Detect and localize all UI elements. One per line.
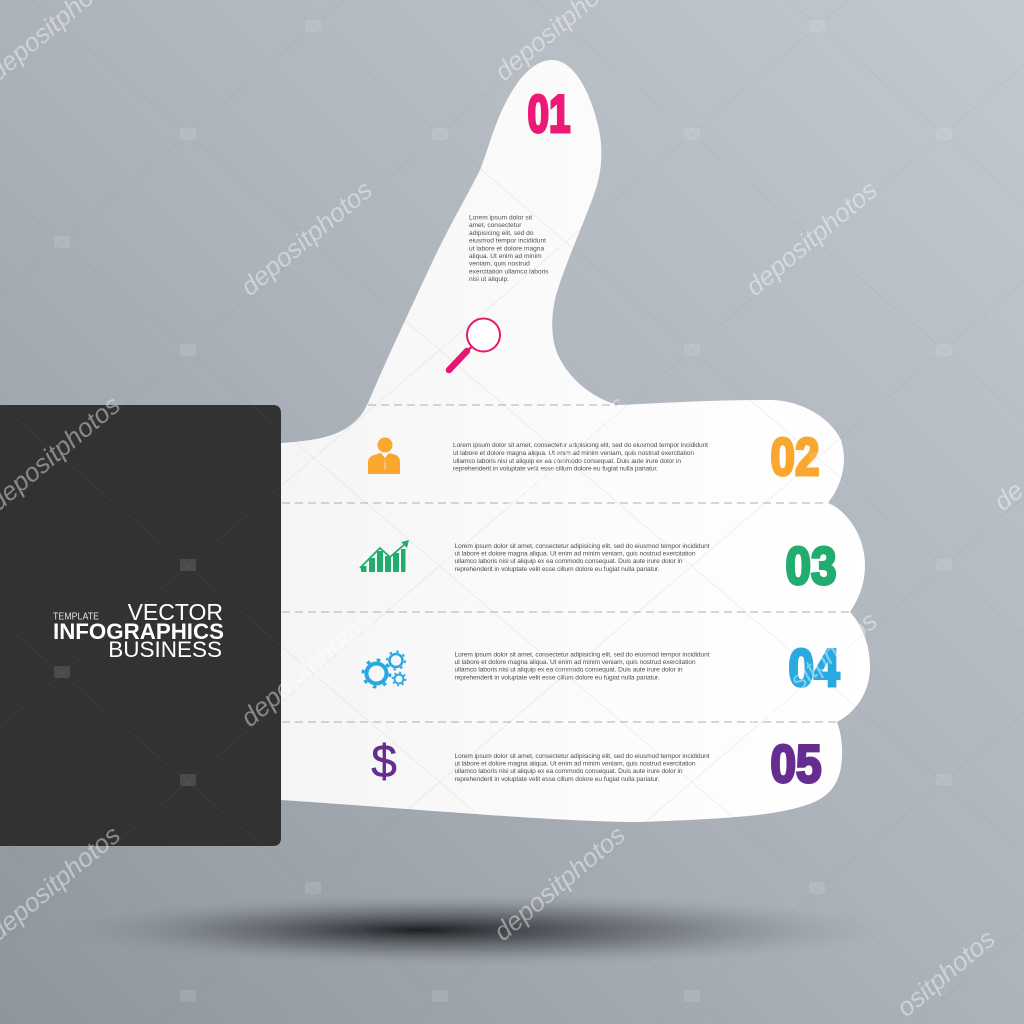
text block 01: eiusmod tempor incididunt [469, 238, 546, 245]
number 02: 02 [770, 428, 820, 487]
icon: dollar sign: $ [371, 735, 397, 787]
text block 02: Lorem ipsum dolor sit amet, consectetur adipisicing elit, sed do eiusmod tempor incididunt [453, 442, 708, 449]
sleeve title: VECTOR [128, 599, 223, 625]
text block 04: Lorem ipsum dolor sit amet, consectetur adipisicing elit, sed do eiusmod tempor incididunt [454, 652, 710, 658]
text block 04: ullamco laboris nisi ut aliquip ex ea commodo consequat. Duis aute irure dolor in [454, 666, 683, 674]
sleeve title: TEMPLATE [53, 612, 99, 622]
text block 04 [454, 652, 710, 682]
text block 02: reprehenderit in voluptate velit esse cillum dolore eu fugiat nulla pariatur. [453, 466, 658, 472]
text block 03: ullamco laboris nisi ut aliquip ex ea commodo consequat. Duis aute irure dolor in [454, 558, 683, 565]
text block 01: nisi ut aliquip. [469, 276, 509, 283]
number 05: 05 [770, 735, 822, 794]
watermarks: depositphotos [740, 175, 883, 302]
icon: gears [363, 652, 406, 687]
text block 05: reprehenderit in voluptate velit esse cillum dolore eu fugiat nulla pariatur. [454, 776, 660, 783]
text block 01: veniam, quis nostrud [469, 261, 530, 268]
sleeve [0, 405, 281, 846]
text block 05: ut labore et dolore magna aliqua. Ut enim ad minim veniam, quis nostrud exercitation [454, 760, 696, 768]
text block 02: ut labore et dolore magna aliqua. Ut enim ad minim veniam, quis nostrud exercitation [453, 450, 694, 457]
thumbs-up hand shape [281, 60, 870, 822]
dashed dividers [282, 405, 850, 722]
text block 03: reprehenderit in voluptate velit esse cillum dolore eu fugiat nulla pariatur. [454, 566, 660, 573]
text block 04: ut labore et dolore magna aliqua. Ut enim ad minim veniam, quis nostrud exercitation [454, 659, 696, 666]
text block 02 [453, 442, 708, 472]
text block 01: amet, consectetur [469, 222, 522, 229]
sleeve title [53, 599, 224, 662]
icon: businessman [368, 438, 400, 474]
sleeve title: BUSINESS [108, 637, 222, 662]
text block 01: Lorem ipsum dolor sit [469, 214, 532, 222]
watermarks: depositphotos [488, 390, 631, 517]
text block 01 [469, 214, 549, 283]
text block 02: ullamco laboris nisi ut aliquip ex ea commodo consequat. Duis aute irure dolor in [453, 458, 681, 465]
icon: growth chart [360, 540, 409, 572]
watermarks: depositphotos [740, 606, 883, 733]
number 01: 01 [528, 85, 570, 144]
text block 01: ut labore et dolore magna [469, 245, 544, 252]
sleeve title: INFOGRAPHICS [53, 619, 224, 644]
text block 03 [454, 543, 710, 573]
text block 03: ut labore et dolore magna aliqua. Ut enim ad minim veniam, quis nostrud exercitation [454, 550, 696, 558]
text block 03: Lorem ipsum dolor sit amet, consectetur adipisicing elit, sed do eiusmod tempor incididunt [454, 543, 710, 550]
text block 01: aliqua. Ut enim ad minim [469, 253, 542, 260]
icon: magnifier [449, 318, 500, 370]
floor shadow [65, 894, 885, 966]
watermarks: depositphotos [235, 606, 378, 733]
text block 05: ullamco laboris nisi ut aliquip ex ea commodo consequat. Duis aute irure dolor in [454, 768, 683, 775]
text block 01: adipisicing elit, sed do [469, 230, 534, 237]
watermarks: depositphotos [235, 175, 378, 302]
number 04: 04 [788, 639, 840, 698]
watermarks: ositphotos [891, 923, 1001, 1023]
text block 05: Lorem ipsum dolor sit amet, consectetur adipisicing elit, sed do eiusmod tempor incididunt [454, 753, 710, 760]
text block 05 [454, 753, 710, 783]
text block 01: exercitation ullamco laboris [469, 268, 549, 275]
watermarks: depositphotos [488, 820, 631, 947]
text block 04: reprehenderit in voluptate velit esse cillum dolore eu fugiat nulla pariatur. [454, 674, 660, 682]
number 03: 03 [786, 537, 836, 596]
